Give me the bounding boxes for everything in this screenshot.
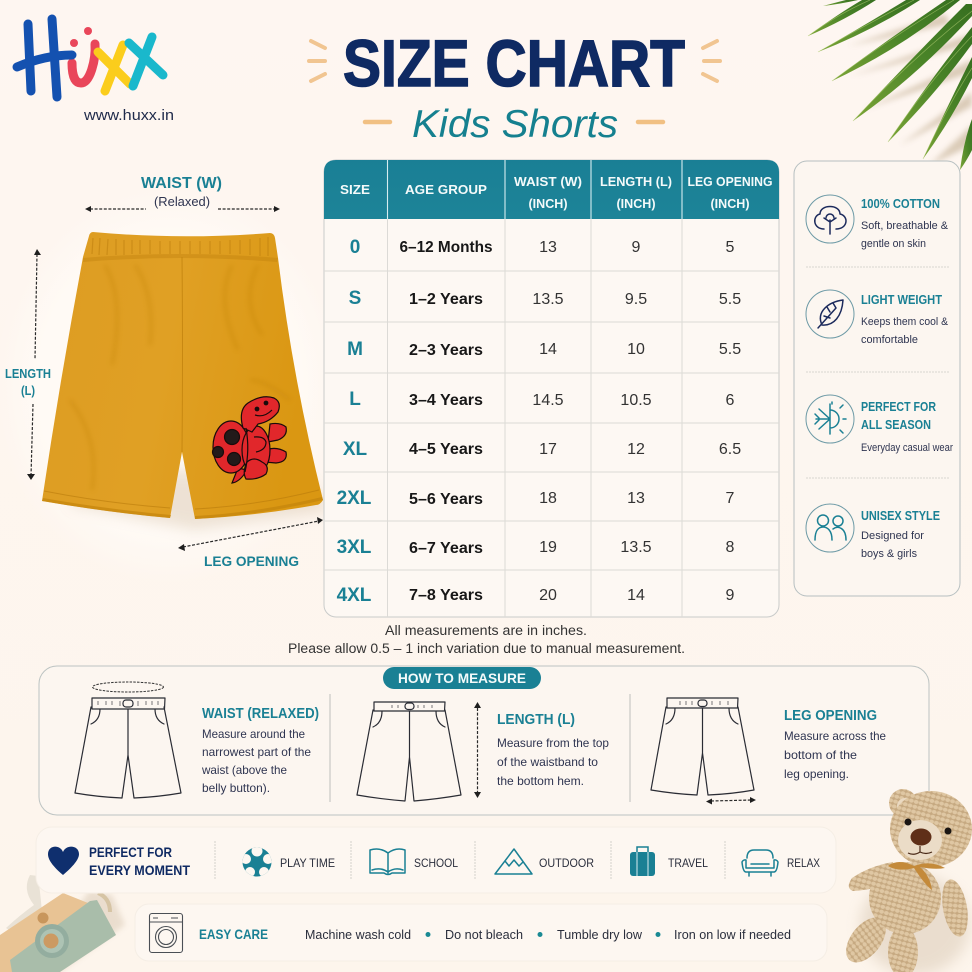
row 3XL: 3XL <box>337 537 372 558</box>
text: length: Measure from the top <box>497 736 609 750</box>
diagram: length <box>357 702 481 801</box>
waist label: WAIST (W) <box>141 175 222 192</box>
decoration: palm leaves <box>808 0 972 170</box>
waist label: (Relaxed) <box>154 194 210 209</box>
shorts garment <box>42 232 323 519</box>
row 2XL: 5–6 Years <box>409 491 483 508</box>
row XL: 4–5 Years <box>409 441 483 458</box>
row 4XL: 20 <box>539 587 557 604</box>
table header: (INCH) <box>528 196 568 211</box>
row L: 10.5 <box>620 392 652 409</box>
row L: 6 <box>726 392 735 409</box>
leg opening label <box>178 517 323 569</box>
feature: all season <box>806 395 953 454</box>
care instructions: Machine wash cold <box>305 927 411 942</box>
table note: All measurements are in inches. <box>385 623 587 638</box>
row S: 1–2 Years <box>409 291 483 308</box>
panel: how to measure <box>39 666 929 815</box>
row 4XL: 4XL <box>337 585 372 606</box>
row 2XL: 18 <box>539 490 557 507</box>
row 3XL: 13.5 <box>620 539 652 556</box>
length label <box>5 249 51 480</box>
feature: cotton: Soft, breathable & <box>861 220 949 232</box>
feature: cotton: gentle on skin <box>861 238 926 250</box>
leg opening label: LEG OPENING <box>204 553 299 569</box>
row XL <box>343 439 741 460</box>
feature: unisex: Designed for <box>861 530 924 542</box>
item: relax: RELAX <box>787 856 820 870</box>
table header: (INCH) <box>616 196 656 211</box>
row 4XL <box>337 585 735 606</box>
row 2XL <box>337 488 735 509</box>
row 4XL: 7–8 Years <box>409 587 483 604</box>
row M: M <box>347 339 363 360</box>
row L: L <box>349 389 361 410</box>
heading pill: HOW TO MEASURE <box>398 670 526 686</box>
text: waist <box>201 706 319 795</box>
text: waist: narrowest part of the <box>202 745 311 759</box>
text: length <box>497 712 609 788</box>
table header: LENGTH (L) <box>600 174 672 189</box>
heading <box>89 844 190 878</box>
feature: light weight: Keeps them cool & <box>861 316 949 328</box>
table header <box>324 160 779 219</box>
text: leg opening: bottom of the <box>784 748 857 762</box>
row XL: XL <box>343 439 368 460</box>
row S: S <box>349 288 361 309</box>
item: play time: PLAY TIME <box>280 856 335 870</box>
row M: 10 <box>627 341 645 358</box>
item: outdoor: OUTDOOR <box>539 856 594 870</box>
diagram: waist <box>75 682 181 798</box>
row L <box>349 389 735 410</box>
heading: EASY CARE <box>199 926 268 942</box>
turtle print <box>212 397 286 483</box>
row S: 13.5 <box>532 291 564 308</box>
feature: all season: Everyday casual wear <box>861 442 953 454</box>
care instructions: Iron on low if needed <box>674 927 791 942</box>
text: waist: Measure around the <box>202 727 305 741</box>
icon: washing machine <box>150 914 182 952</box>
care instructions <box>305 927 791 942</box>
decoration: wooden toy camera <box>0 875 125 972</box>
heading pill <box>383 667 541 689</box>
text: leg opening: LEG OPENING <box>784 708 877 724</box>
row 3XL: 8 <box>726 539 735 556</box>
row S: 5.5 <box>719 291 741 308</box>
row 0: 0 <box>350 237 360 258</box>
row 2XL: 7 <box>726 490 735 507</box>
item: travel <box>630 847 708 876</box>
care instructions: Tumble dry low <box>557 927 643 942</box>
row L: 3–4 Years <box>409 392 483 409</box>
feature: light weight: comfortable <box>861 334 918 346</box>
row L: 14.5 <box>532 392 564 409</box>
row 4XL: 14 <box>627 587 645 604</box>
text: leg opening <box>784 708 886 781</box>
feature: cotton <box>806 195 949 250</box>
feature: light weight: LIGHT WEIGHT <box>861 293 942 307</box>
length label: LENGTH <box>5 367 51 381</box>
heading: EVERY MOMENT <box>89 862 190 878</box>
panel: features <box>794 161 960 596</box>
feature: cotton: 100% COTTON <box>861 197 940 211</box>
row M: 2–3 Years <box>409 342 483 359</box>
table note: Please allow 0.5 – 1 inch variation due to manual measurement. <box>288 641 685 656</box>
feature: all season: ALL SEASON <box>861 418 931 432</box>
photo: yellow kids shorts with measurements <box>0 175 345 585</box>
feature: unisex <box>806 504 940 560</box>
length label: (L) <box>21 384 35 398</box>
row 3XL: 19 <box>539 539 557 556</box>
row 0: 6–12 Months <box>400 239 492 256</box>
item: school: SCHOOL <box>414 856 458 870</box>
logo: Huxx <box>17 19 163 97</box>
item: school <box>370 849 458 874</box>
row S: 9.5 <box>625 291 647 308</box>
table header: AGE GROUP <box>405 182 487 197</box>
feature: unisex: boys & girls <box>861 548 917 560</box>
subtitle: Kids Shorts <box>412 103 618 146</box>
title: SIZE CHART <box>343 26 685 100</box>
row 0: 9 <box>632 239 641 256</box>
table note <box>288 623 685 656</box>
row 4XL: 9 <box>726 587 735 604</box>
care instructions: Do not bleach <box>445 927 523 942</box>
table header: SIZE <box>340 182 370 197</box>
decoration: crochet teddy bear <box>838 789 972 972</box>
feature: light weight <box>806 290 949 346</box>
item: outdoor <box>495 849 594 874</box>
row XL: 12 <box>627 441 645 458</box>
feature: all season: PERFECT FOR <box>861 400 936 414</box>
text: leg opening: Measure across the <box>784 729 886 743</box>
text: waist: waist (above the <box>201 763 287 777</box>
heading: PERFECT FOR <box>89 844 172 860</box>
row 3XL <box>337 537 735 558</box>
row M: 14 <box>539 341 557 358</box>
panel: perfect for every moment <box>36 827 836 893</box>
icon: heart <box>48 847 79 875</box>
text: length: LENGTH (L) <box>497 712 575 728</box>
item: relax <box>742 850 820 876</box>
row 2XL: 13 <box>627 490 645 507</box>
row 2XL: 2XL <box>337 488 372 509</box>
row XL: 17 <box>539 441 557 458</box>
feature: unisex: UNISEX STYLE <box>861 509 940 523</box>
row 0: 5 <box>726 239 735 256</box>
diagram: leg opening <box>651 698 756 804</box>
row 0: 13 <box>539 239 557 256</box>
table header: LEG OPENING <box>688 174 772 189</box>
table header: WAIST (W) <box>514 174 582 189</box>
row M <box>347 339 741 360</box>
waist label <box>85 175 280 212</box>
text: waist: belly button). <box>202 781 270 795</box>
website url: www.huxx.in <box>83 107 174 124</box>
panel: easy care <box>135 904 827 961</box>
row S <box>349 288 741 309</box>
row XL: 6.5 <box>719 441 741 458</box>
text: waist: WAIST (RELAXED) <box>202 706 319 722</box>
item: travel: TRAVEL <box>668 856 708 870</box>
size table <box>324 160 779 617</box>
row 0 <box>350 237 735 258</box>
row M: 5.5 <box>719 341 741 358</box>
table header: (INCH) <box>710 196 750 211</box>
row 3XL: 6–7 Years <box>409 540 483 557</box>
text: length: of the waistband to <box>497 755 598 769</box>
text: length: the bottom hem. <box>497 774 584 788</box>
item: play time <box>241 846 335 877</box>
text: leg opening: leg opening. <box>784 767 849 781</box>
